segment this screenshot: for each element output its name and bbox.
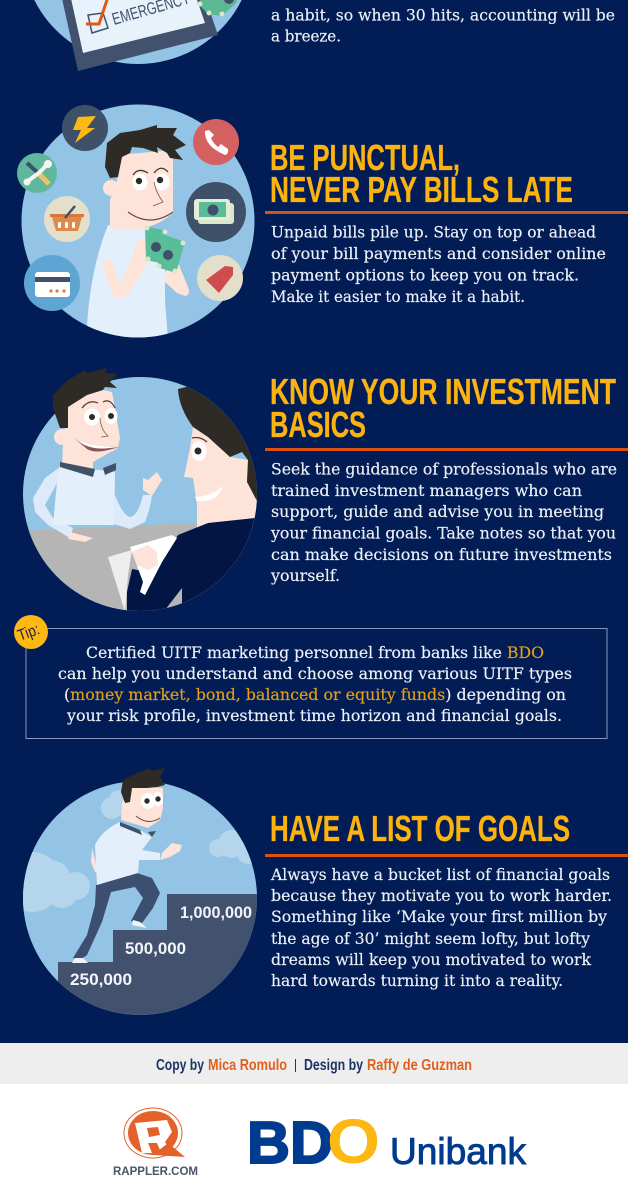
logo: rappler: RAPPLER.COM (113, 1164, 198, 1178)
man figure (86, 125, 189, 340)
section 4 body text: dreams will keep you motivated to work (271, 950, 591, 969)
section 1 body text: a breeze. (271, 26, 341, 46)
section 4 body text: Something like ‘Make your first million by (271, 907, 608, 926)
section 2 body text (271, 222, 606, 306)
logo: BDO Unibank: O (327, 1107, 380, 1177)
logo: rappler (113, 1108, 198, 1178)
section 2 body text: Make it easier to make it a habit. (271, 287, 525, 306)
credits band: Mica Romulo (208, 1057, 287, 1074)
climbing man (72, 768, 182, 963)
step labels: 1,000,000 (180, 903, 252, 922)
section 4 body text (270, 865, 612, 990)
section 1 body text (271, 6, 615, 46)
illustration: emergency checklist clipboard (22, 0, 254, 71)
logo: BDO Unibank (247, 1107, 526, 1177)
section 4 body text: Always have a bucket list of financial goals (270, 865, 610, 884)
heading: be punctual (270, 137, 573, 210)
section 3 body text: yourself. (270, 566, 340, 585)
section 2 body text: payment options to keep you on track. (271, 266, 579, 284)
step labels: 250,000 (70, 970, 132, 989)
section 3 body text (270, 460, 617, 585)
tip badge (14, 615, 48, 649)
illustration: man with bills and payment icons (17, 104, 254, 340)
icon: price tag (197, 255, 243, 301)
logo: BDO Unibank: Unibank (390, 1131, 526, 1172)
tip box (14, 615, 607, 738)
sponsor area background (0, 1084, 628, 1200)
tip badge: Tip: (16, 621, 42, 645)
credits band: Design by (304, 1057, 363, 1074)
section 3 body text: Seek the guidance of professionals who are (271, 460, 617, 478)
section 2 body text: of your bill payments and consider online (271, 244, 606, 263)
left man (33, 368, 162, 542)
tip text (58, 643, 572, 725)
credits band: Raffy de Guzman (367, 1057, 472, 1074)
section 2 body text: Unpaid bills pile up. Stay on top or ahead (271, 222, 596, 242)
section 3 body text: your financial goals. Take notes so that you (270, 524, 616, 542)
logo: BDO Unibank: BD (247, 1110, 333, 1176)
icon: lightning bolt (62, 105, 108, 151)
icon: shopping basket (44, 196, 90, 242)
icon: phone (193, 119, 239, 165)
section 3 body text: support, guide and advise you in meeting (271, 502, 604, 521)
tip text: Certified UITF marketing personnel from banks like BDO (86, 643, 544, 662)
icon: tools (17, 153, 57, 193)
clouds and stairs (23, 790, 257, 1015)
credits band: Copy by (156, 1057, 204, 1074)
section 4 body text: because they motivate you to work harder. (271, 886, 612, 905)
icon: cash (186, 182, 246, 242)
icon: credit card (24, 255, 80, 311)
tip text: your risk profile, investment time horizon and financial goals. (66, 706, 562, 725)
step labels: 500,000 (125, 939, 186, 958)
section 4 body text: the age of 30’ might seem lofty, but lofty (271, 929, 591, 948)
section 3 body text: trained investment managers who can (271, 481, 582, 500)
tip text: can help you understand and choose among various UITF types (58, 664, 572, 683)
heading: be punctual: BE PUNCTUAL, (270, 137, 460, 178)
step labels (70, 903, 252, 989)
heading: know your investment basics (270, 371, 616, 445)
table, paper and right man (28, 386, 257, 611)
heading: know your investment basics: BASICS (270, 404, 366, 445)
section 4 body text: hard towards turning it into a reality. (271, 971, 563, 990)
illustration: two men at an investment meeting (20, 368, 264, 615)
illustration: man climbing money steps (23, 768, 257, 1015)
tip text: (money market, bond, balanced or equity funds ) depending on (64, 685, 566, 704)
credits band (0, 1043, 628, 1084)
section 3 body text: can make decisions on future investments (271, 545, 612, 564)
section 1 body text: a habit, so when 30 hits, accounting will be (271, 6, 615, 24)
